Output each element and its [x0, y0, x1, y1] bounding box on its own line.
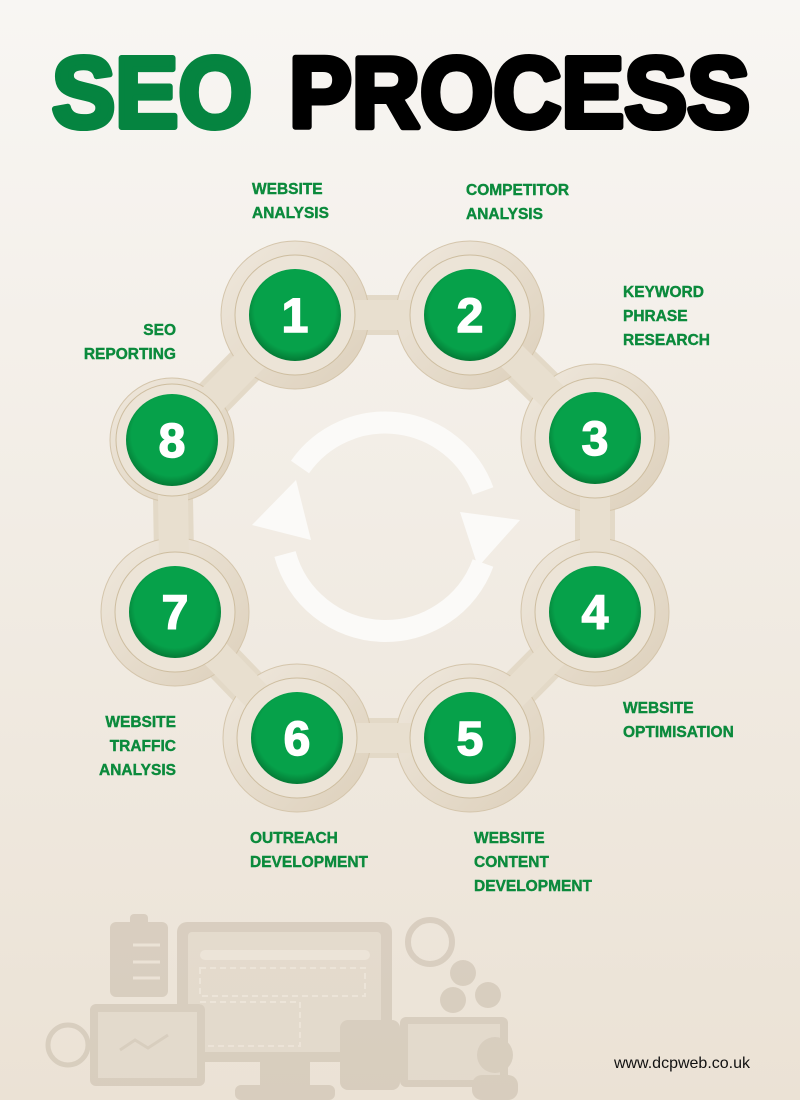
step 3 — [549, 392, 641, 484]
label 5: DEVELOPMENT — [474, 878, 593, 895]
step labels — [84, 181, 734, 895]
center cycle arrows — [252, 423, 520, 631]
title: SEO — [52, 37, 252, 149]
step 7: 7 — [162, 587, 188, 640]
label 5: CONTENT — [474, 854, 549, 871]
step 2 — [424, 269, 516, 361]
step 8 — [126, 394, 218, 486]
step 8: 8 — [159, 415, 185, 468]
label 1: WEBSITE — [252, 181, 323, 198]
magnifier and gears — [408, 920, 501, 1013]
cycle ring of steps — [101, 241, 669, 812]
step 1: 1 — [282, 290, 308, 343]
label 1: ANALYSIS — [252, 205, 329, 222]
label 3: KEYWORD — [623, 284, 704, 301]
label 5: WEBSITE — [474, 830, 545, 847]
step 4 — [549, 566, 641, 658]
label 7: ANALYSIS — [99, 762, 176, 779]
label 6: DEVELOPMENT — [250, 854, 369, 871]
step 5: 5 — [457, 713, 483, 766]
step 5 — [424, 692, 516, 784]
label 6: OUTREACH — [250, 830, 338, 847]
main monitor — [177, 922, 392, 1100]
step 7 — [129, 566, 221, 658]
label 3: RESEARCH — [623, 332, 710, 349]
label 8: SEO — [143, 322, 176, 339]
title — [52, 37, 750, 149]
step 6 — [251, 692, 343, 784]
label 2: ANALYSIS — [466, 206, 543, 223]
label 4: OPTIMISATION — [623, 724, 734, 741]
tablet and person — [340, 1017, 518, 1100]
small monitor left — [48, 1004, 205, 1086]
label 2: COMPETITOR — [466, 182, 569, 199]
step 4: 4 — [582, 587, 609, 640]
label 8: REPORTING — [84, 346, 176, 363]
label 7: TRAFFIC — [110, 738, 176, 755]
step numbers — [126, 269, 641, 784]
step 6: 6 — [284, 713, 310, 766]
bottom illustration — [48, 914, 518, 1100]
label 3: PHRASE — [623, 308, 688, 325]
title: PROCESS — [289, 37, 750, 149]
step 1 — [249, 269, 341, 361]
label 7: WEBSITE — [105, 714, 176, 731]
label 4: WEBSITE — [623, 700, 694, 717]
step 3: 3 — [582, 413, 608, 466]
step 2: 2 — [457, 290, 483, 343]
clipboard — [110, 914, 168, 997]
website url: www.dcpweb.co.uk — [613, 1055, 751, 1072]
